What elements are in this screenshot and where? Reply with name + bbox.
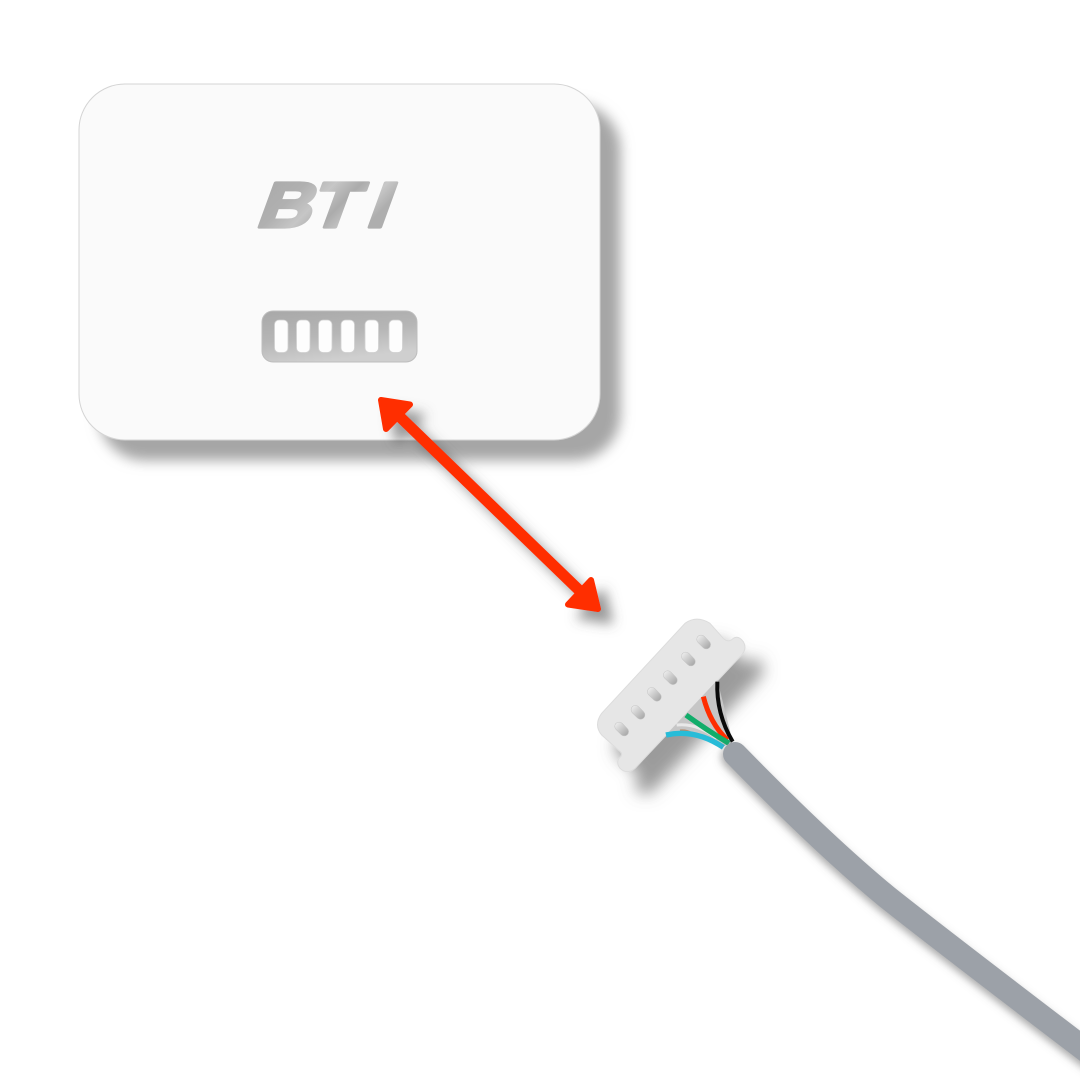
- white wire: [677, 725, 717, 738]
- small brown wire: [680, 731, 692, 733]
- green wire: [686, 715, 729, 743]
- BTI logo: B: [249, 170, 329, 241]
- connector: white plug with wires: [597, 619, 745, 772]
- black wire: [717, 682, 733, 742]
- BTI logo: T: [302, 170, 374, 241]
- wire fan backing: [666, 680, 733, 747]
- BTI logo: I: [359, 170, 406, 241]
- cable: grey sheath: [735, 754, 1080, 1061]
- contact pins: [613, 633, 712, 738]
- cyan wire: [666, 733, 723, 747]
- port with six slots: [262, 311, 417, 362]
- module body: [79, 84, 600, 440]
- red wire: [703, 697, 727, 740]
- panel: BTI module: [79, 84, 600, 440]
- arrow: double-headed red connection arrow: [381, 400, 598, 609]
- plug body: [597, 619, 745, 772]
